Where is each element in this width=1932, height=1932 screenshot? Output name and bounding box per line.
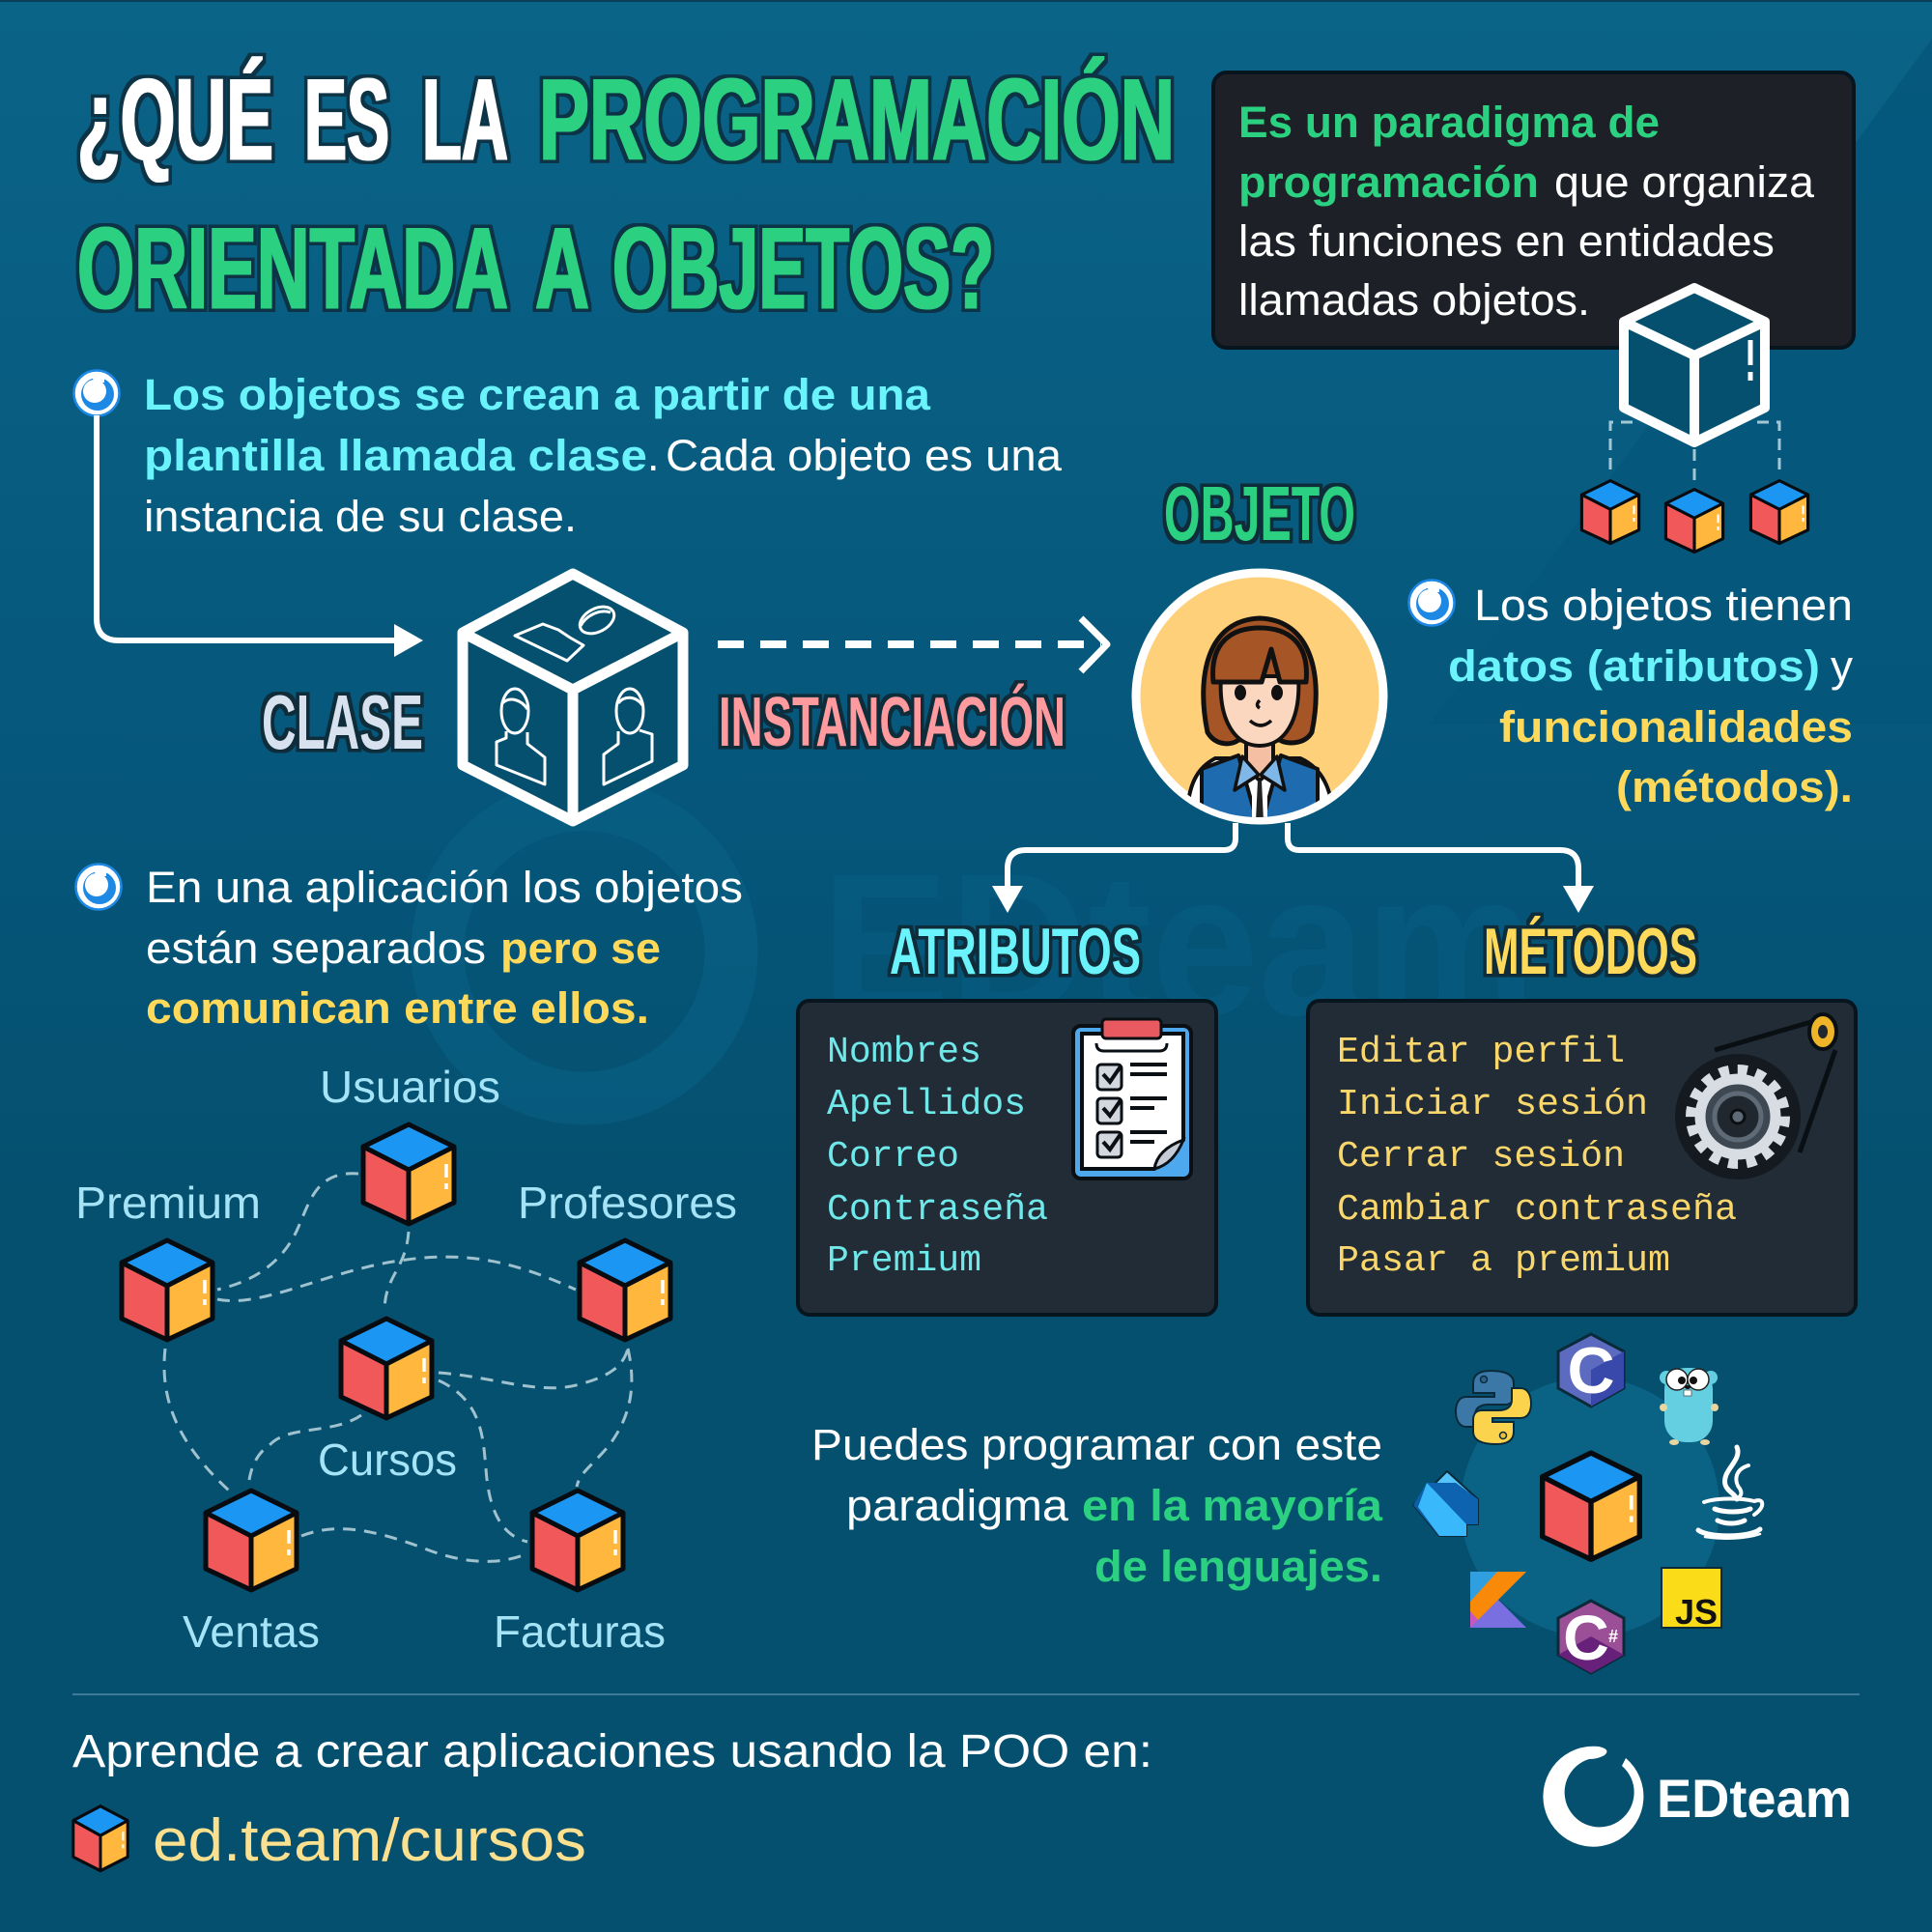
panel: attributes xyxy=(798,1001,1216,1315)
language ring with center cube xyxy=(1461,1378,1719,1636)
text: communication: pero se xyxy=(500,923,661,973)
title: LA xyxy=(422,55,508,185)
icon: gear and belt xyxy=(1675,1014,1836,1179)
divider xyxy=(72,1693,1860,1695)
bullet: data and methods xyxy=(1408,580,1455,626)
panel: methods: Cerrar sesión xyxy=(1337,1136,1625,1178)
label: CLASE: CLASE xyxy=(262,679,423,765)
network diagram: connected objects xyxy=(75,1062,737,1657)
arrows: object to attributes and methods xyxy=(992,823,1594,913)
icon: C: C xyxy=(1567,1334,1615,1407)
icon: Python xyxy=(1456,1371,1531,1444)
text: objects and class: . xyxy=(647,431,660,480)
panel: methods: Editar perfil xyxy=(1337,1032,1625,1073)
icon: Java xyxy=(1698,1447,1762,1539)
panel: methods: Pasar a premium xyxy=(1337,1240,1670,1282)
panel: definition: las funciones en entidades xyxy=(1238,216,1775,266)
panel: definition xyxy=(1213,72,1854,348)
panel: attributes: Nombres xyxy=(827,1032,981,1073)
logo: EDteam xyxy=(1543,1747,1852,1847)
text: data and methods: y xyxy=(1831,641,1854,691)
icon: class cube with person outlines xyxy=(463,574,683,821)
network diagram: connected objects: Facturas xyxy=(494,1606,666,1657)
panel: definition: Es un paradigma de xyxy=(1238,98,1660,147)
text: objects and class: instancia de su clase. xyxy=(144,492,577,541)
heading: MÉTODOS: MÉTODOS xyxy=(1484,915,1697,988)
watermark: EDteam logo xyxy=(438,805,1536,1098)
label: INSTANCIACIÓN: INSTANCIACIÓN xyxy=(719,683,1065,761)
panel: methods: Iniciar sesión xyxy=(1337,1084,1648,1125)
bullet: objects and class xyxy=(73,371,120,415)
title: ES xyxy=(304,55,389,185)
network diagram: connected objects: Cursos xyxy=(318,1435,457,1485)
panel: definition: programación xyxy=(1238,157,1539,207)
network diagram: connected objects: Profesores xyxy=(518,1178,737,1228)
panel: attributes: Contraseña xyxy=(827,1189,1048,1231)
text: objects and class: plantilla llamada clase xyxy=(144,431,647,480)
icon: big white cube with three instances xyxy=(1581,288,1808,553)
title xyxy=(77,55,1175,333)
text: languages: de lenguajes. xyxy=(1094,1542,1382,1591)
icon: C sharp: # xyxy=(1608,1627,1618,1646)
title: ¿QUÉ xyxy=(77,55,273,185)
icon: Dart xyxy=(1413,1471,1478,1536)
arrow: bullet to class xyxy=(97,415,423,657)
icon: C sharp: C xyxy=(1563,1602,1609,1673)
heading: ATRIBUTOS: ATRIBUTOS xyxy=(890,915,1141,988)
panel: attributes: Apellidos xyxy=(827,1084,1026,1125)
text: objects and class: Los objetos se crean a partir de una xyxy=(144,370,931,419)
panel: attributes: Correo xyxy=(827,1136,959,1178)
text: languages: Puedes programar con este xyxy=(811,1420,1382,1469)
icon: JavaScript: JS xyxy=(1675,1592,1718,1632)
icon: clipboard xyxy=(1073,1019,1191,1179)
icon: Go gopher xyxy=(1660,1368,1719,1445)
icon: small cube xyxy=(73,1806,128,1871)
icon: Kotlin xyxy=(1470,1572,1526,1628)
network diagram: connected objects: Usuarios xyxy=(320,1062,500,1112)
title: PROGRAMACIÓN xyxy=(539,55,1175,185)
text: communication xyxy=(146,863,743,1033)
panel: methods xyxy=(1308,1001,1856,1315)
arrow: instantiation xyxy=(718,618,1107,671)
text: data and methods: Los objetos tienen xyxy=(1474,581,1853,630)
text: languages: en la mayoría xyxy=(1082,1481,1383,1530)
panel: methods: Cambiar contraseña xyxy=(1337,1189,1737,1231)
network diagram: connected objects: Ventas xyxy=(183,1606,320,1657)
watermark: EDteam logo: EDteam xyxy=(821,831,1536,1058)
text: communication: En una aplicación los objetos xyxy=(146,863,743,912)
icon: JavaScript xyxy=(1662,1568,1721,1632)
link: courses url: ed.team/cursos xyxy=(153,1807,586,1874)
title: OBJETOS? xyxy=(612,204,994,333)
logo: EDteam: EDteam xyxy=(1657,1768,1852,1829)
text: languages xyxy=(811,1420,1383,1591)
network diagram: connected objects: Premium xyxy=(75,1178,261,1228)
text: data and methods: funcionalidades xyxy=(1499,702,1853,752)
label: OBJETO: OBJETO xyxy=(1164,470,1355,556)
panel: definition: llamadas objetos. xyxy=(1238,275,1590,325)
panel: attributes: Premium xyxy=(827,1240,981,1282)
text: call to action: Aprende a crear aplicaciones usando la POO en: xyxy=(72,1726,1152,1777)
text: languages: paradigma xyxy=(846,1481,1069,1530)
text: data and methods: (métodos). xyxy=(1616,762,1853,811)
panel: definition: que organiza xyxy=(1554,157,1815,207)
text: communication: comunican entre ellos. xyxy=(146,983,649,1033)
text: data and methods: datos (atributos) xyxy=(1448,641,1820,691)
bullet: communication xyxy=(75,864,122,910)
text: objects and class xyxy=(144,370,1063,541)
text: objects and class: Cada objeto es una xyxy=(666,431,1063,480)
text: communication: están separados xyxy=(146,923,486,973)
title: A xyxy=(535,204,589,333)
text: data and methods xyxy=(1448,581,1854,811)
icon: C sharp xyxy=(1558,1601,1624,1673)
icon: object avatar xyxy=(1136,573,1383,831)
title: ORIENTADA xyxy=(77,204,508,333)
